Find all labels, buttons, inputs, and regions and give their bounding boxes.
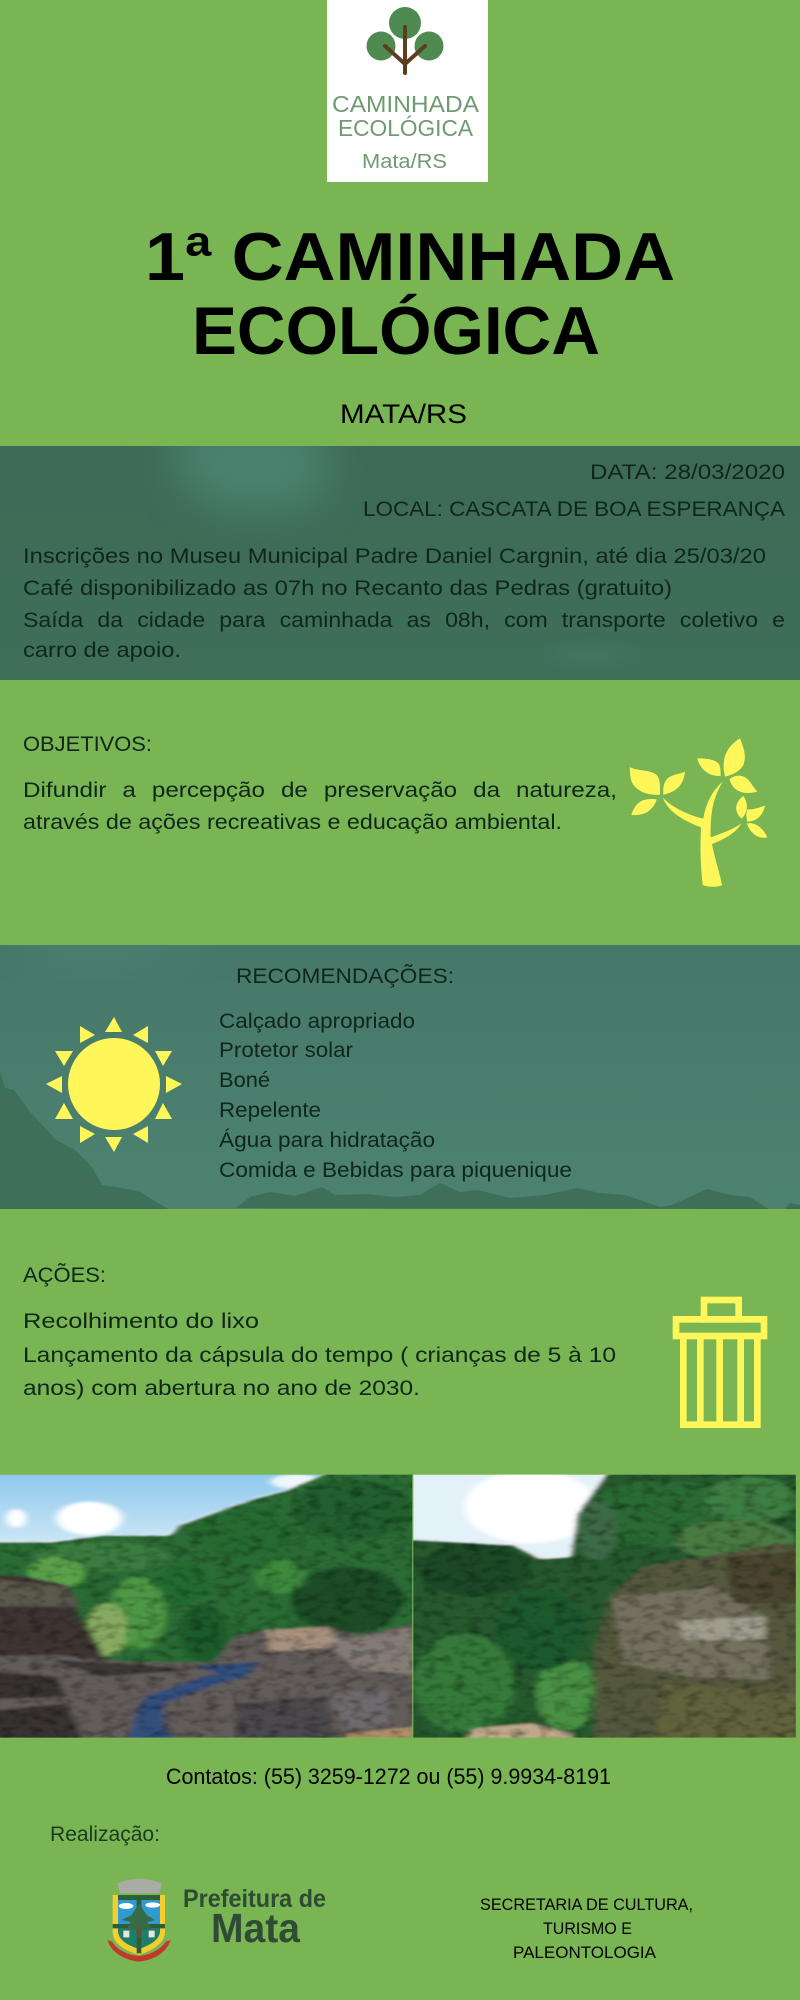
icon: trash bin (676, 1300, 764, 1425)
logo text: ECOLÓGICA (338, 115, 474, 141)
registration details: carro de apoio. (23, 639, 181, 662)
recommendations list: Boné (219, 1069, 270, 1092)
panel: event info (0, 420, 800, 680)
icon: municipal crest (107, 1879, 171, 1962)
recommendations list: Repelente (219, 1099, 321, 1122)
recommendations list (219, 1010, 572, 1182)
heading: actions: AÇÕES: (23, 1263, 106, 1287)
title: 1ª CAMINHADA (145, 219, 675, 295)
actions text: Lançamento da cápsula do tempo ( crianças de 5 à 10 (23, 1344, 616, 1367)
objectives text (23, 779, 617, 834)
label: realização: Realização: (50, 1823, 160, 1846)
logo: Prefeitura de Mata (107, 1879, 326, 1962)
prefeitura wordmark: Prefeitura de (183, 1885, 326, 1913)
organizer: secretaria: TURISMO E (543, 1919, 632, 1938)
photo: forest cliff (413, 1474, 796, 1738)
recommendations list: Protetor solar (219, 1039, 353, 1062)
icon: yellow tree (630, 738, 767, 887)
prefeitura wordmark (183, 1885, 326, 1951)
recommendations list: Água para hidratação (219, 1129, 435, 1152)
contacts: Contatos: (55) 3259-1272 ou (55) 9.9934-8191 (166, 1764, 611, 1789)
prefeitura wordmark: Mata (211, 1905, 301, 1951)
icon: tree logo (366, 7, 444, 73)
registration details: Café disponibilizado as 07h no Recanto das Pedras (gratuito) (23, 577, 672, 600)
objectives text: através de ações recreativas e educação ambiental. (23, 811, 562, 834)
heading: objectives: OBJETIVOS: (23, 733, 152, 756)
photos (0, 1474, 796, 1738)
actions text: Recolhimento do lixo (23, 1310, 259, 1333)
organizer: secretaria: SECRETARIA DE CULTURA, (480, 1895, 693, 1914)
organizer: secretaria (480, 1895, 693, 1962)
heading: recommendations: RECOMENDAÇÕES: (236, 964, 454, 988)
actions text (23, 1310, 616, 1400)
panel: actions (23, 1263, 764, 1425)
photo: waterfall rocks (0, 1474, 412, 1738)
location: LOCAL: CASCATA DE BOA ESPERANÇA (363, 498, 785, 521)
title (145, 219, 675, 369)
registration details: Saída da cidade para caminhada as 08h, com transporte coletivo e (23, 609, 785, 632)
date: DATA: 28/03/2020 (590, 461, 785, 484)
logo text: CAMINHADA (332, 91, 480, 117)
recommendations list: Calçado apropriado (219, 1010, 415, 1033)
actions text: anos) com abertura no ano de 2030. (23, 1377, 420, 1400)
organizer: secretaria: PALEONTOLOGIA (513, 1943, 657, 1962)
objectives text: Difundir a percepção de preservação da natureza, (23, 779, 617, 802)
title: ECOLÓGICA (192, 293, 600, 369)
icon: sun (46, 1017, 182, 1152)
logo text: Mata/RS (362, 151, 447, 173)
registration details (23, 545, 785, 662)
mountains (0, 1072, 800, 1209)
logo text (332, 91, 480, 173)
registration details: Inscrições no Museu Municipal Padre Daniel Cargnin, até dia 25/03/20 (23, 545, 766, 568)
recommendations list: Comida e Bebidas para piquenique (219, 1159, 572, 1182)
logo (327, 0, 488, 182)
panel: recommendations (0, 930, 800, 1209)
panel: objectives (23, 733, 767, 887)
subtitle: MATA/RS (340, 399, 467, 429)
